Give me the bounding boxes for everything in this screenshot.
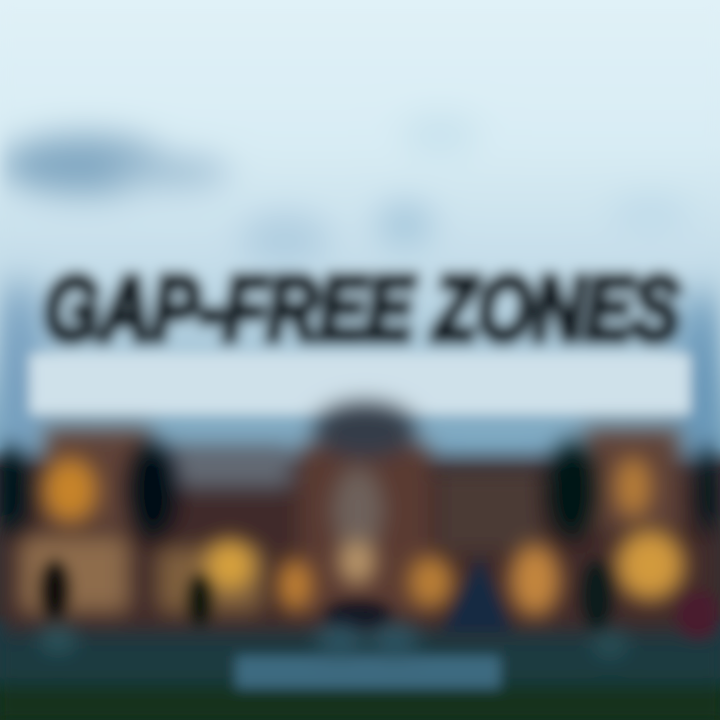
ground	[0, 622, 720, 720]
sky background	[0, 0, 720, 465]
lawn highlights	[40, 624, 628, 657]
clouds	[0, 115, 720, 470]
lit windows	[43, 457, 684, 616]
doors and shrubs	[40, 555, 720, 639]
dark trees	[0, 440, 720, 540]
building body	[0, 402, 720, 632]
pale caption band	[30, 354, 690, 414]
building	[0, 402, 720, 639]
pale path strip	[236, 656, 500, 688]
